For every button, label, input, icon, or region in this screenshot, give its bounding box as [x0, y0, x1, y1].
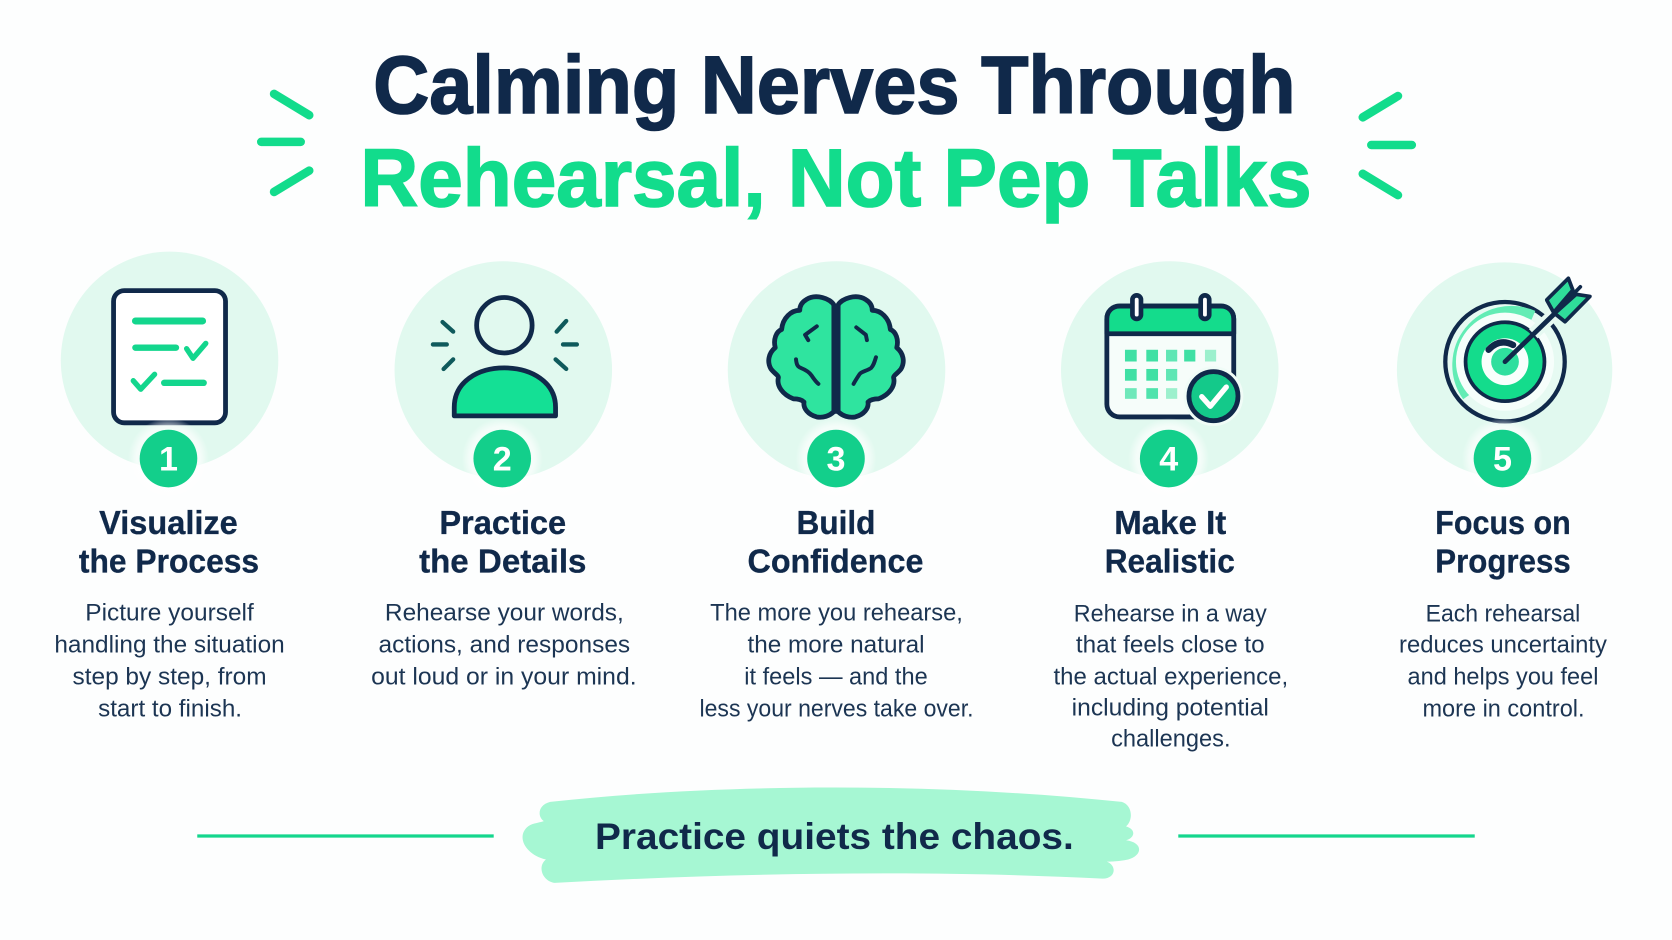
number badge 5: 5 — [1493, 440, 1512, 478]
number badge 1 — [128, 418, 209, 499]
text block: step 5 description: reduces uncertainty — [1399, 632, 1607, 659]
text block: step 1 description: Picture yourself — [85, 600, 254, 627]
number badge 5 — [1462, 418, 1543, 499]
panel: step 5 focus on progress — [1397, 262, 1612, 723]
icon: target with arrow — [1445, 278, 1590, 421]
heading: make it realistic: Make It — [1114, 505, 1226, 542]
heading: build confidence: Build — [797, 505, 875, 542]
heading: focus on progress — [1435, 505, 1571, 581]
text block: step 4 description: the actual experience, — [1054, 664, 1288, 691]
icon backdrop circle — [395, 261, 612, 479]
text block: step 4 description: including potential — [1072, 695, 1269, 722]
icon: right accent rays — [1363, 96, 1412, 195]
brush stroke banner — [523, 787, 1139, 883]
heading: make it realistic — [1105, 505, 1235, 581]
number badge 2 — [462, 418, 543, 499]
icon backdrop circle — [1397, 262, 1612, 478]
icon: calendar with check — [1107, 295, 1243, 426]
text block: step 3 description: less your nerves take over. — [700, 696, 974, 723]
number badge 3: 3 — [827, 440, 845, 478]
panel: step 3 build confidence — [700, 261, 974, 723]
panel: step 2 practice the details — [371, 261, 637, 691]
number badge 4: 4 — [1159, 440, 1178, 478]
heading: visualize the process — [79, 505, 259, 581]
text block: step 1 description: step by step, from — [73, 664, 267, 691]
text block: step 1 description: handling the situation — [54, 632, 285, 659]
heading: focus on progress: Focus on — [1435, 505, 1571, 542]
text block: step 5 description — [1399, 601, 1607, 723]
text block: step 5 description: Each rehearsal — [1426, 601, 1580, 628]
text block: step 2 description: out loud or in your mind. — [371, 664, 637, 691]
text block: step 3 description: the more natural — [747, 632, 925, 659]
callout text: Practice quiets the chaos. — [595, 815, 1074, 857]
text block: step 3 description — [700, 600, 974, 723]
heading: visualize the process: Visualize — [99, 505, 238, 542]
panel: step 1 visualize the process — [54, 252, 285, 723]
callout: practice quiets the chaos — [197, 787, 1475, 883]
text block: step 4 description — [1054, 601, 1288, 752]
heading: build confidence: Confidence — [747, 544, 923, 581]
icon: left accent rays — [261, 94, 309, 192]
text block: step 3 description: it feels — and the — [744, 664, 928, 691]
icon backdrop circle — [61, 252, 278, 469]
icon backdrop circle — [728, 261, 945, 479]
heading: visualize the process: the Process — [79, 544, 259, 581]
text block: step 4 description: Rehearse in a way — [1074, 601, 1267, 628]
heading: practice the details — [419, 505, 586, 581]
text block: step 1 description: start to finish. — [98, 696, 242, 723]
text block: step 4 description: challenges. — [1111, 725, 1231, 752]
heading: build confidence — [747, 505, 923, 581]
heading: make it realistic: Realistic — [1105, 544, 1235, 581]
icon: person with rays — [433, 298, 577, 416]
text block: step 2 description — [371, 600, 637, 691]
panel: step 4 make it realistic — [1054, 261, 1288, 752]
number badge 1: 1 — [159, 440, 178, 478]
text block: step 2 description: Rehearse your words, — [385, 600, 624, 627]
text block: step 2 description: actions, and responses — [379, 632, 630, 659]
title line 2: Rehearsal, Not Pep Talks — [360, 133, 1312, 224]
text block: step 5 description: and helps you feel — [1408, 664, 1598, 691]
title line 1: Calming Nerves Through — [373, 40, 1296, 131]
icon: checklist — [114, 291, 226, 423]
icon backdrop circle — [1061, 261, 1279, 479]
text block: step 1 description — [54, 600, 285, 723]
icon: brain — [769, 297, 903, 417]
number badge 2: 2 — [493, 440, 512, 478]
heading: practice the details: the Details — [419, 544, 586, 581]
number badge 4 — [1128, 418, 1209, 499]
text block: step 5 description: more in control. — [1422, 696, 1585, 723]
text block: step 4 description: that feels close to — [1076, 632, 1265, 659]
title — [360, 40, 1312, 224]
text block: step 3 description: The more you rehearse, — [710, 600, 963, 627]
heading: focus on progress: Progress — [1435, 544, 1571, 581]
number badge 3 — [795, 418, 877, 499]
heading: practice the details: Practice — [439, 505, 566, 542]
